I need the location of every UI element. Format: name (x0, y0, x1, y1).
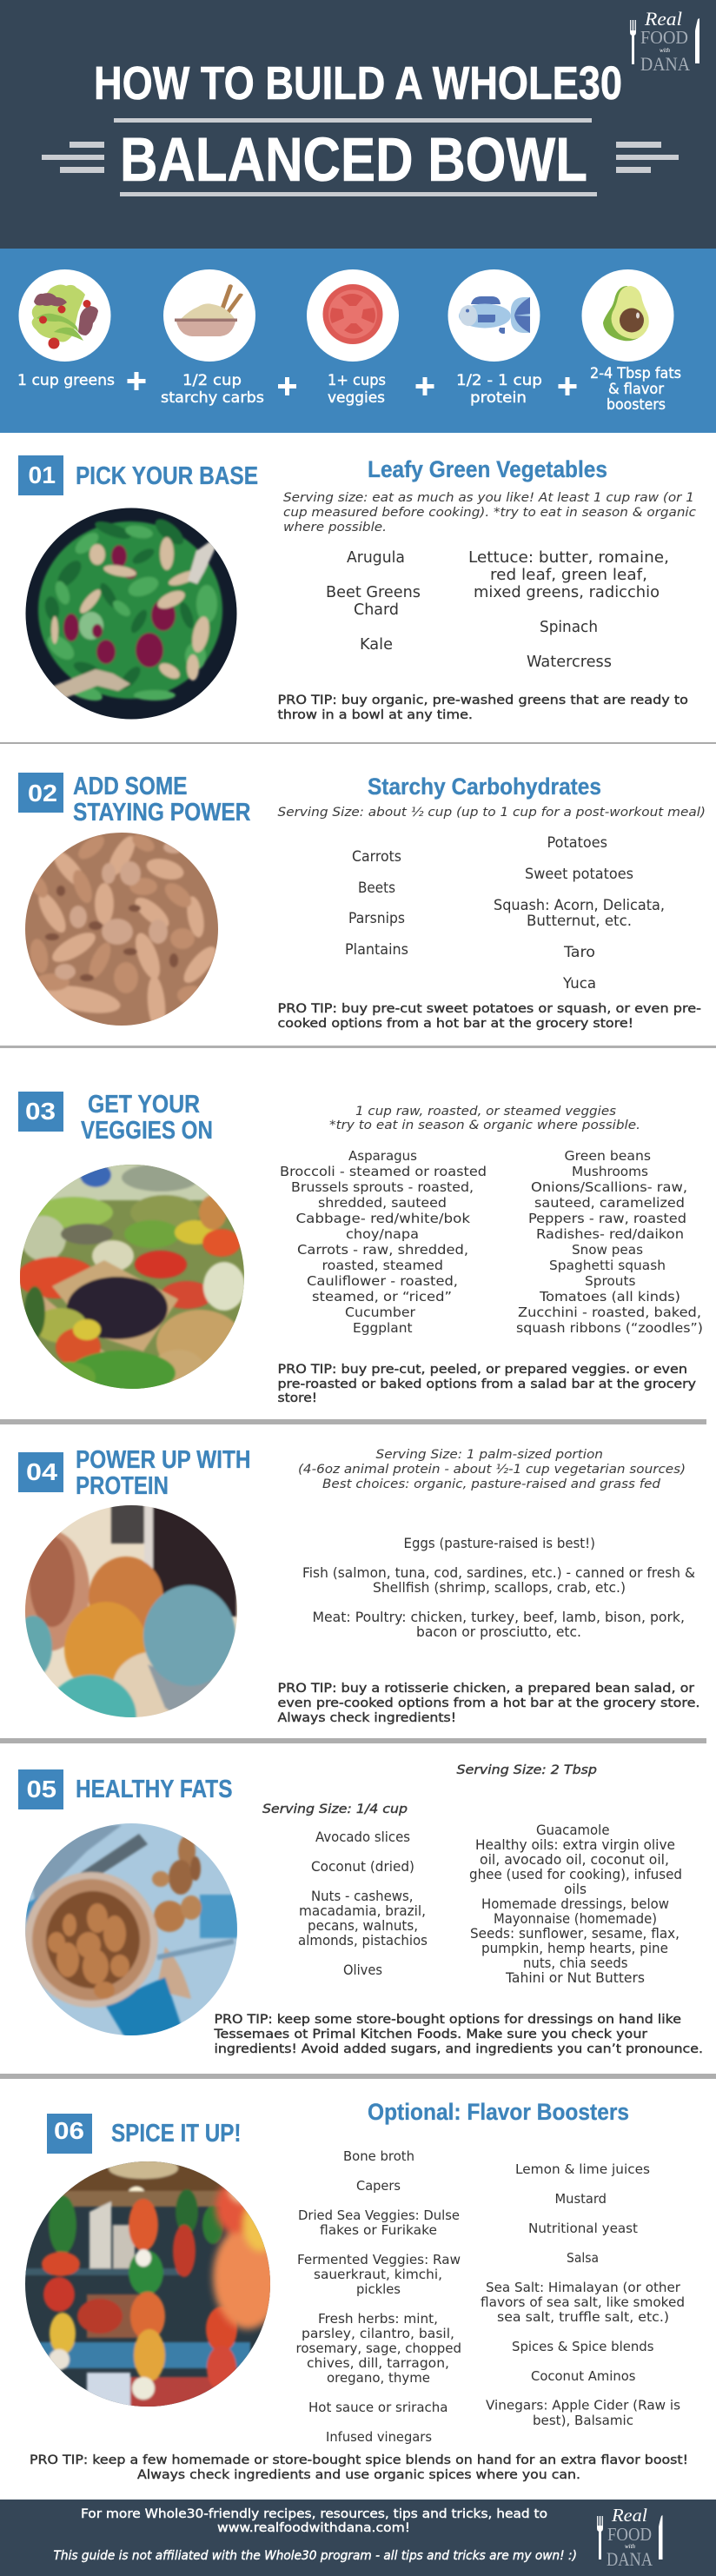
list: fats left: Nuts - cashews, (311, 1888, 414, 1904)
serving note: 1/4 cup: Serving Size: 1/4 cup (262, 1803, 408, 1816)
step number 06 (47, 2114, 92, 2154)
list: veggies right: sauteed, caramelized (534, 1195, 685, 1211)
panel: step 04 protein (18, 1449, 699, 1724)
serving size note: Serving size: eat as much as you like! At least 1 cup raw (or 1 (283, 491, 694, 505)
list: leafy greens left: Chard (354, 601, 399, 619)
heading: power up with protein (76, 1446, 250, 1500)
list: fats right: Tahini or Nut Butters (505, 1969, 645, 1986)
serving size note: Serving Size: about ½ cup (up to 1 cup for a post-workout meal) (278, 806, 706, 820)
labels: 1/2 - 1 cup protein: protein (470, 389, 527, 407)
pro tip: PRO TIP: keep a few homemade or store-bought spice blends on hand for an extra flavor boost! (30, 2453, 688, 2467)
list: boosters left: parsley, cilantro, basil, (302, 2326, 454, 2341)
list: fats right: ghee (used for cooking), infused (469, 1866, 682, 1882)
plus (558, 377, 577, 395)
pro tip (278, 1363, 696, 1405)
photo: salad bowl (25, 508, 237, 721)
list: boosters right (481, 2161, 685, 2428)
serving note (298, 1448, 686, 1491)
title line two: BALANCED BOWL (120, 126, 587, 195)
list: fats right: Seeds: sunflower, sesame, flax, (470, 1925, 680, 1942)
list: veggies left: choy/napa (346, 1226, 419, 1242)
list: protein options (302, 1535, 695, 1640)
pro tip: ingredients! Avoid added sugars, and ingredients you can’t pronounce. (214, 2042, 703, 2056)
heading: add some staying power: ADD SOME (73, 773, 188, 800)
labels: 1/2 cup starchy carbs: starchy carbs (161, 389, 264, 407)
photo: coloured eggs (25, 1505, 237, 1717)
list: leafy greens left: Beet Greens (326, 583, 421, 601)
list: boosters right: Mustard (554, 2191, 607, 2207)
footer logo (597, 2505, 662, 2570)
heading: power up with protein: PROTEIN (76, 1472, 169, 1500)
list: fats right: Mayonnaise (homemade) (494, 1910, 657, 1927)
list: fats right: oils (564, 1881, 587, 1897)
pro tip: Always check ingredients! (278, 1711, 456, 1725)
list: boosters right: sea salt, truffle salt, etc.) (497, 2309, 669, 2325)
list: boosters right: Spices & Spice blends (512, 2339, 653, 2354)
right speed bars (616, 142, 679, 173)
list: protein options: Meat: Poultry: chicken, turkey, beef, lamb, bison, pork, (313, 1609, 685, 1625)
list: veggies right: Spaghetti squash (549, 1258, 666, 1273)
panel: step 03 veggies (17, 1091, 703, 1405)
list: fats right: Guacamole (536, 1822, 610, 1838)
list: starchy right (494, 834, 665, 993)
footer disclaimer: This guide is not affiliated with the Whole30 program - all tips and tricks are my own! :) (54, 2549, 577, 2563)
list: veggies right: squash ribbons (“zoodles”) (516, 1320, 703, 1336)
label: 1 cup greens: 1 cup greens (17, 372, 115, 389)
pro tip: Always check ingredients and use organic spices where you can. (137, 2468, 580, 2482)
serving note: Serving Size: 1 palm-sized portion (375, 1448, 603, 1462)
list: boosters right: Vinegars: Apple Cider (Raw is (486, 2397, 680, 2413)
list: boosters left: flakes or Furikake (320, 2222, 437, 2238)
heading: get your veggies on (81, 1091, 213, 1145)
header banner (0, 0, 716, 249)
list: protein options: bacon or prosciutto, etc. (416, 1623, 581, 1640)
labels: 1+ cups veggies: 1+ cups (328, 372, 386, 389)
logo: real food with dana: Real (644, 8, 682, 30)
list: veggies left: roasted, steamed (322, 1258, 443, 1273)
labels: 2-4 Tbsp fats and flavor boosters: boosters (607, 396, 666, 414)
list: fats left: Avocado slices (315, 1829, 410, 1845)
list: boosters left: Capers (356, 2178, 401, 2194)
list: protein options: Fish (salmon, tuna, cod, sardines, etc.) - canned or fresh & (302, 1564, 695, 1581)
list: veggies right: Snow peas (572, 1242, 643, 1258)
step number 03 (18, 1092, 63, 1132)
heading: add some staying power: STAYING POWER (73, 799, 251, 827)
list: fats left: macadamia, brazil, (299, 1902, 426, 1919)
pro tip: PRO TIP: buy a rotisserie chicken, a prepared bean salad, or (278, 1682, 694, 1696)
photo: hanging chili garlands (24, 2158, 282, 2412)
list: veggies right: Radishes- red/daikon (536, 1226, 684, 1242)
list: fats left: almonds, pistachios (298, 1932, 428, 1949)
list: boosters left: Infused vinegars (326, 2429, 432, 2445)
list: veggies left: Asparagus (348, 1148, 417, 1164)
list: fats right: oil, avocado oil, coconut oil, (480, 1851, 669, 1868)
labels: 2-4 Tbsp fats and flavor boosters: 2-4 Tbsp fats (590, 365, 681, 382)
serving note: (4-6oz animal protein - about ½-1 cup vegetarian sources) (298, 1463, 686, 1477)
list: protein options: Shellfish (shrimp, scallops, crab, etc.) (373, 1579, 626, 1596)
heading: get your veggies on: GET YOUR (88, 1091, 200, 1119)
list: starchy right: Squash: Acorn, Delicata, (494, 897, 665, 914)
step number 01: 01 (28, 461, 56, 488)
icon: fish (448, 269, 540, 362)
labels: 1/2 cup starchy carbs: 1/2 cup (182, 372, 242, 389)
icon: avocado (582, 269, 674, 362)
list: fats right (469, 1822, 682, 1986)
pro tip: throw in a bowl at any time. (278, 708, 473, 722)
pro tip (30, 2453, 688, 2482)
title line one: HOW TO BUILD A WHOLE30 (94, 57, 622, 110)
step number 05: 05 (26, 1776, 56, 1803)
list: fats right: Healthy oils: extra virgin olive (475, 1836, 675, 1853)
pro tip: PRO TIP: buy pre-cut sweet potatoes or squash, or even pre- (278, 1002, 701, 1016)
footer logo: FOOD (607, 2524, 652, 2545)
list: veggies left: Eggplant (353, 1320, 412, 1336)
heading: healthy fats: HEALTHY FATS (76, 1776, 233, 1803)
list: boosters right: Coconut Aminos (531, 2368, 636, 2384)
list: leafy greens right (468, 548, 669, 671)
list: starchy left: Plantains (345, 941, 408, 959)
footer logo: DANA (607, 2548, 653, 2570)
heading: power up with protein: POWER UP WITH (76, 1446, 250, 1474)
list: starchy right: Butternut, etc. (527, 913, 632, 930)
serving note: Best choices: organic, pasture-raised and grass fed (322, 1477, 661, 1491)
list: boosters left: Fresh herbs: mint, (318, 2311, 438, 2327)
title rule top (114, 118, 592, 123)
list: boosters right: Nutritional yeast (528, 2221, 638, 2236)
list: leafy greens right: Watercress (527, 653, 612, 671)
photo: walnuts in a jar (24, 1822, 238, 2047)
list: boosters left: oregano, thyme (327, 2370, 430, 2386)
list: starchy left: Beets (358, 880, 395, 897)
pro tip (278, 1002, 701, 1031)
serving note (329, 1105, 640, 1132)
list: veggies left: Broccoli - steamed or roasted (280, 1164, 487, 1179)
list: leafy greens right: Lettuce: butter, romaine, (468, 548, 669, 567)
panel: step 05 healthy fats (18, 1763, 703, 2056)
list: leafy greens right: Spinach (540, 618, 598, 636)
footer call to action: www.realfoodwithdana.com! (217, 2521, 410, 2535)
list: boosters left: chives, dill, tarragon, (307, 2355, 449, 2371)
pro tip: Tessemaes ot Primal Kitchen Foods. Make sure you check your (213, 2028, 647, 2042)
footer logo: Real (611, 2505, 647, 2526)
list: boosters right: Sea Salt: Himalayan (or other (486, 2280, 681, 2295)
pro tip (213, 2013, 703, 2056)
photo: market vegetables (17, 1163, 245, 1396)
logo: real food with dana: FOOD (640, 27, 688, 48)
serving note: 2 tbsp: Serving Size: 2 Tbsp (457, 1763, 597, 1777)
photo: sweet potatoes (24, 831, 221, 1032)
icon: tomato slice (307, 269, 399, 362)
panel: step 06 spice it up (24, 2099, 688, 2482)
list: boosters left (295, 2148, 461, 2445)
list: leafy greens left (326, 548, 421, 654)
list: starchy right: Sweet potatoes (525, 866, 633, 883)
labels: 1+ cups veggies (328, 372, 386, 407)
list: veggies left: Cauliflower - roasted, (307, 1273, 458, 1289)
pro tip: cooked options from a hot bar at the grocery store! (278, 1017, 633, 1031)
list: starchy left: Carrots (352, 848, 401, 866)
list: boosters right: best), Balsamic (533, 2413, 633, 2428)
plus (127, 372, 146, 390)
formula band (0, 249, 716, 433)
step number 03: 03 (25, 1098, 56, 1125)
serving note: 1 cup raw, roasted, or steamed veggies (355, 1105, 616, 1119)
list: veggies left: Cabbage- red/white/bok (295, 1211, 470, 1226)
list: fats right: pumpkin, hemp hearts, pine (481, 1940, 668, 1956)
list: veggies left: Cucumber (345, 1305, 416, 1320)
list: starchy right: Potatoes (547, 834, 607, 852)
list: leafy greens left: Arugula (347, 548, 405, 567)
footer (0, 2500, 716, 2576)
list: starchy left (345, 848, 408, 959)
list: boosters left: sauerkraut, kimchi, (314, 2267, 442, 2282)
panel: step 01 pick your base (18, 455, 696, 722)
list: protein options: Eggs (pasture-raised is best!) (403, 1535, 595, 1551)
section title: flavor boosters: Optional: Flavor Boosters (368, 2099, 629, 2125)
logo: real food with dana: with (660, 47, 671, 54)
serving note: *try to eat in season & organic where possible. (329, 1119, 640, 1132)
logo: real food with dana (630, 8, 699, 75)
list: veggies left: steamed, or “riced” (312, 1289, 452, 1305)
step number 04 (18, 1452, 63, 1492)
labels: 2-4 Tbsp fats and flavor boosters: & flavor (608, 381, 664, 398)
list: starchy right: Yuca (562, 975, 596, 993)
list: veggies left (280, 1148, 487, 1336)
pro tip: PRO TIP: buy organic, pre-washed greens that are ready to (278, 694, 688, 707)
list: veggies right (516, 1148, 703, 1336)
list: fats right: nuts, chia seeds (523, 1955, 627, 1971)
list: veggies right: Onions/Scallions- raw, (531, 1179, 687, 1195)
heading: add some staying power (73, 773, 251, 827)
list: veggies left: shredded, sauteed (318, 1195, 447, 1211)
logo: real food with dana: DANA (640, 53, 690, 75)
list: veggies right: Tomatoes (all kinds) (539, 1289, 680, 1305)
list: starchy right: Taro (563, 944, 595, 961)
list: leafy greens right: red leaf, green leaf, (490, 566, 647, 584)
list: leafy greens right: mixed greens, radicchio (474, 583, 660, 601)
pro tip: store! (278, 1391, 317, 1405)
list: veggies right: Zucchini - roasted, baked, (518, 1305, 701, 1320)
section title: leafy greens: Leafy Green Vegetables (368, 456, 607, 482)
list: veggies left: Brussels sprouts - roasted, (291, 1179, 474, 1195)
list: boosters left: Bone broth (343, 2148, 414, 2164)
list: boosters right: Lemon & lime juices (515, 2161, 650, 2177)
step number 05 (18, 1769, 63, 1809)
labels: 1+ cups veggies: veggies (328, 389, 385, 407)
list: fats left: Coconut (dried) (311, 1858, 414, 1875)
heading: get your veggies on: VEGGIES ON (81, 1117, 213, 1145)
list: fats left: Olives (343, 1962, 382, 1978)
step number 02: 02 (28, 780, 57, 807)
labels: 1/2 - 1 cup protein: 1/2 - 1 cup (456, 372, 542, 389)
serving size note: where possible. (283, 521, 387, 534)
step number 02 (18, 773, 63, 813)
pro tip: PRO TIP: buy pre-cut, peeled, or prepared veggies. or even (278, 1363, 687, 1377)
pro tip (278, 1682, 700, 1725)
heading: pick your base: PICK YOUR BASE (76, 462, 258, 490)
list: starchy left: Parsnips (348, 910, 405, 927)
list: boosters left: Dried Sea Veggies: Dulse (298, 2208, 460, 2223)
list: fats left: pecans, walnuts, (308, 1917, 418, 1934)
panel: step 02 staying power (18, 773, 706, 1032)
footer call to action: For more Whole30-friendly recipes, resources, tips and tricks, head to (81, 2507, 547, 2521)
pro tip (278, 694, 688, 722)
labels: 1/2 cup starchy carbs (161, 372, 264, 407)
list: veggies right: Peppers - raw, roasted (528, 1211, 686, 1226)
list: leafy greens left: Kale (360, 635, 393, 654)
heading: spice it up: SPICE IT UP! (111, 2120, 242, 2148)
list: veggies right: Green beans (565, 1148, 651, 1164)
labels: 1/2 - 1 cup protein (456, 372, 542, 407)
serving size note: cup measured before cooking). *try to eat in season & organic (283, 506, 696, 520)
step number 04: 04 (26, 1458, 57, 1485)
list: boosters left: Hot sauce or sriracha (308, 2400, 448, 2415)
pro tip: pre-roasted or baked options from a salad bar at the grocery (278, 1378, 696, 1391)
step number 06: 06 (54, 2117, 84, 2144)
list: veggies left: Carrots - raw, shredded, (297, 1242, 468, 1258)
list: boosters left: pickles (356, 2281, 401, 2297)
icon: salad greens (19, 269, 111, 362)
section title: starchy carbohydrates: Starchy Carbohydrates (368, 773, 601, 800)
list: boosters left: rosemary, sage, chopped (295, 2340, 461, 2356)
list: boosters right: Salsa (567, 2250, 599, 2266)
left speed bars (42, 142, 104, 173)
pro tip: PRO TIP: keep some store-bought options for dressings on hand like (214, 2013, 681, 2027)
plus (278, 377, 296, 395)
title rule bottom (120, 192, 597, 196)
list: veggies right: Mushrooms (572, 1164, 648, 1179)
footer call to action (81, 2507, 547, 2535)
icon: rice bowl (163, 269, 255, 362)
labels: 2-4 Tbsp fats and flavor boosters (590, 365, 681, 414)
list: boosters left: Fermented Veggies: Raw (297, 2252, 461, 2267)
list: fats left (298, 1829, 428, 1978)
plus (415, 377, 434, 395)
list: veggies right: Sprouts (585, 1273, 636, 1289)
pro tip: even pre-cooked options from a hot bar at the grocery store. (278, 1696, 700, 1710)
step number 01 (18, 455, 63, 495)
serving size note (283, 491, 696, 534)
footer logo: with (625, 2543, 636, 2550)
list: boosters right: flavors of sea salt, like smoked (481, 2294, 685, 2310)
list: fats right: Homemade dressings, below (481, 1895, 669, 1912)
